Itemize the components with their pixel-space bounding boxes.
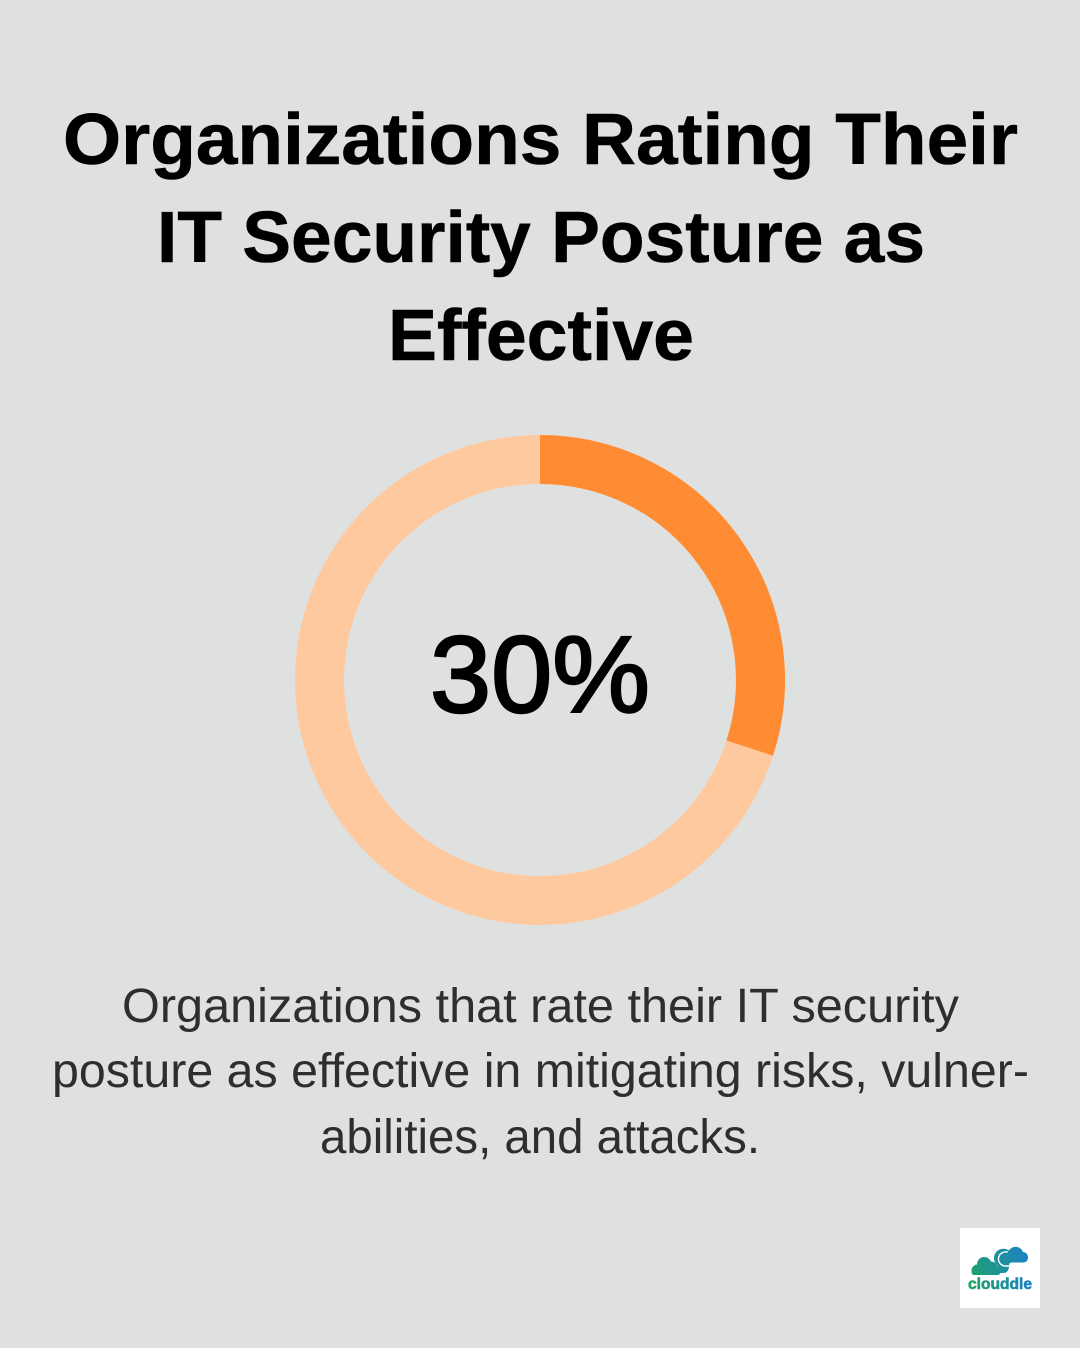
description text: posture as effective in mitigating risks, vulner- (52, 1045, 1029, 1098)
title (63, 100, 1018, 376)
title: IT Security Posture as (157, 198, 925, 278)
description text: abilities, and attacks. (320, 1111, 760, 1164)
logo wordmark: clouddle (968, 1276, 1032, 1293)
donut chart: 30% (320, 460, 760, 900)
description text: Organizations that rate their IT security (122, 980, 959, 1033)
icon: cloud cutout line (998, 1252, 1012, 1266)
title: Organizations Rating Their (63, 100, 1018, 180)
donut track (320, 460, 760, 900)
title: Effective (388, 296, 694, 376)
donut value arc (540, 460, 760, 748)
description text (52, 980, 1029, 1164)
icon: clouds (972, 1247, 1028, 1275)
logo: clouddle (960, 1228, 1040, 1308)
value: 30%: 30% (430, 614, 650, 736)
